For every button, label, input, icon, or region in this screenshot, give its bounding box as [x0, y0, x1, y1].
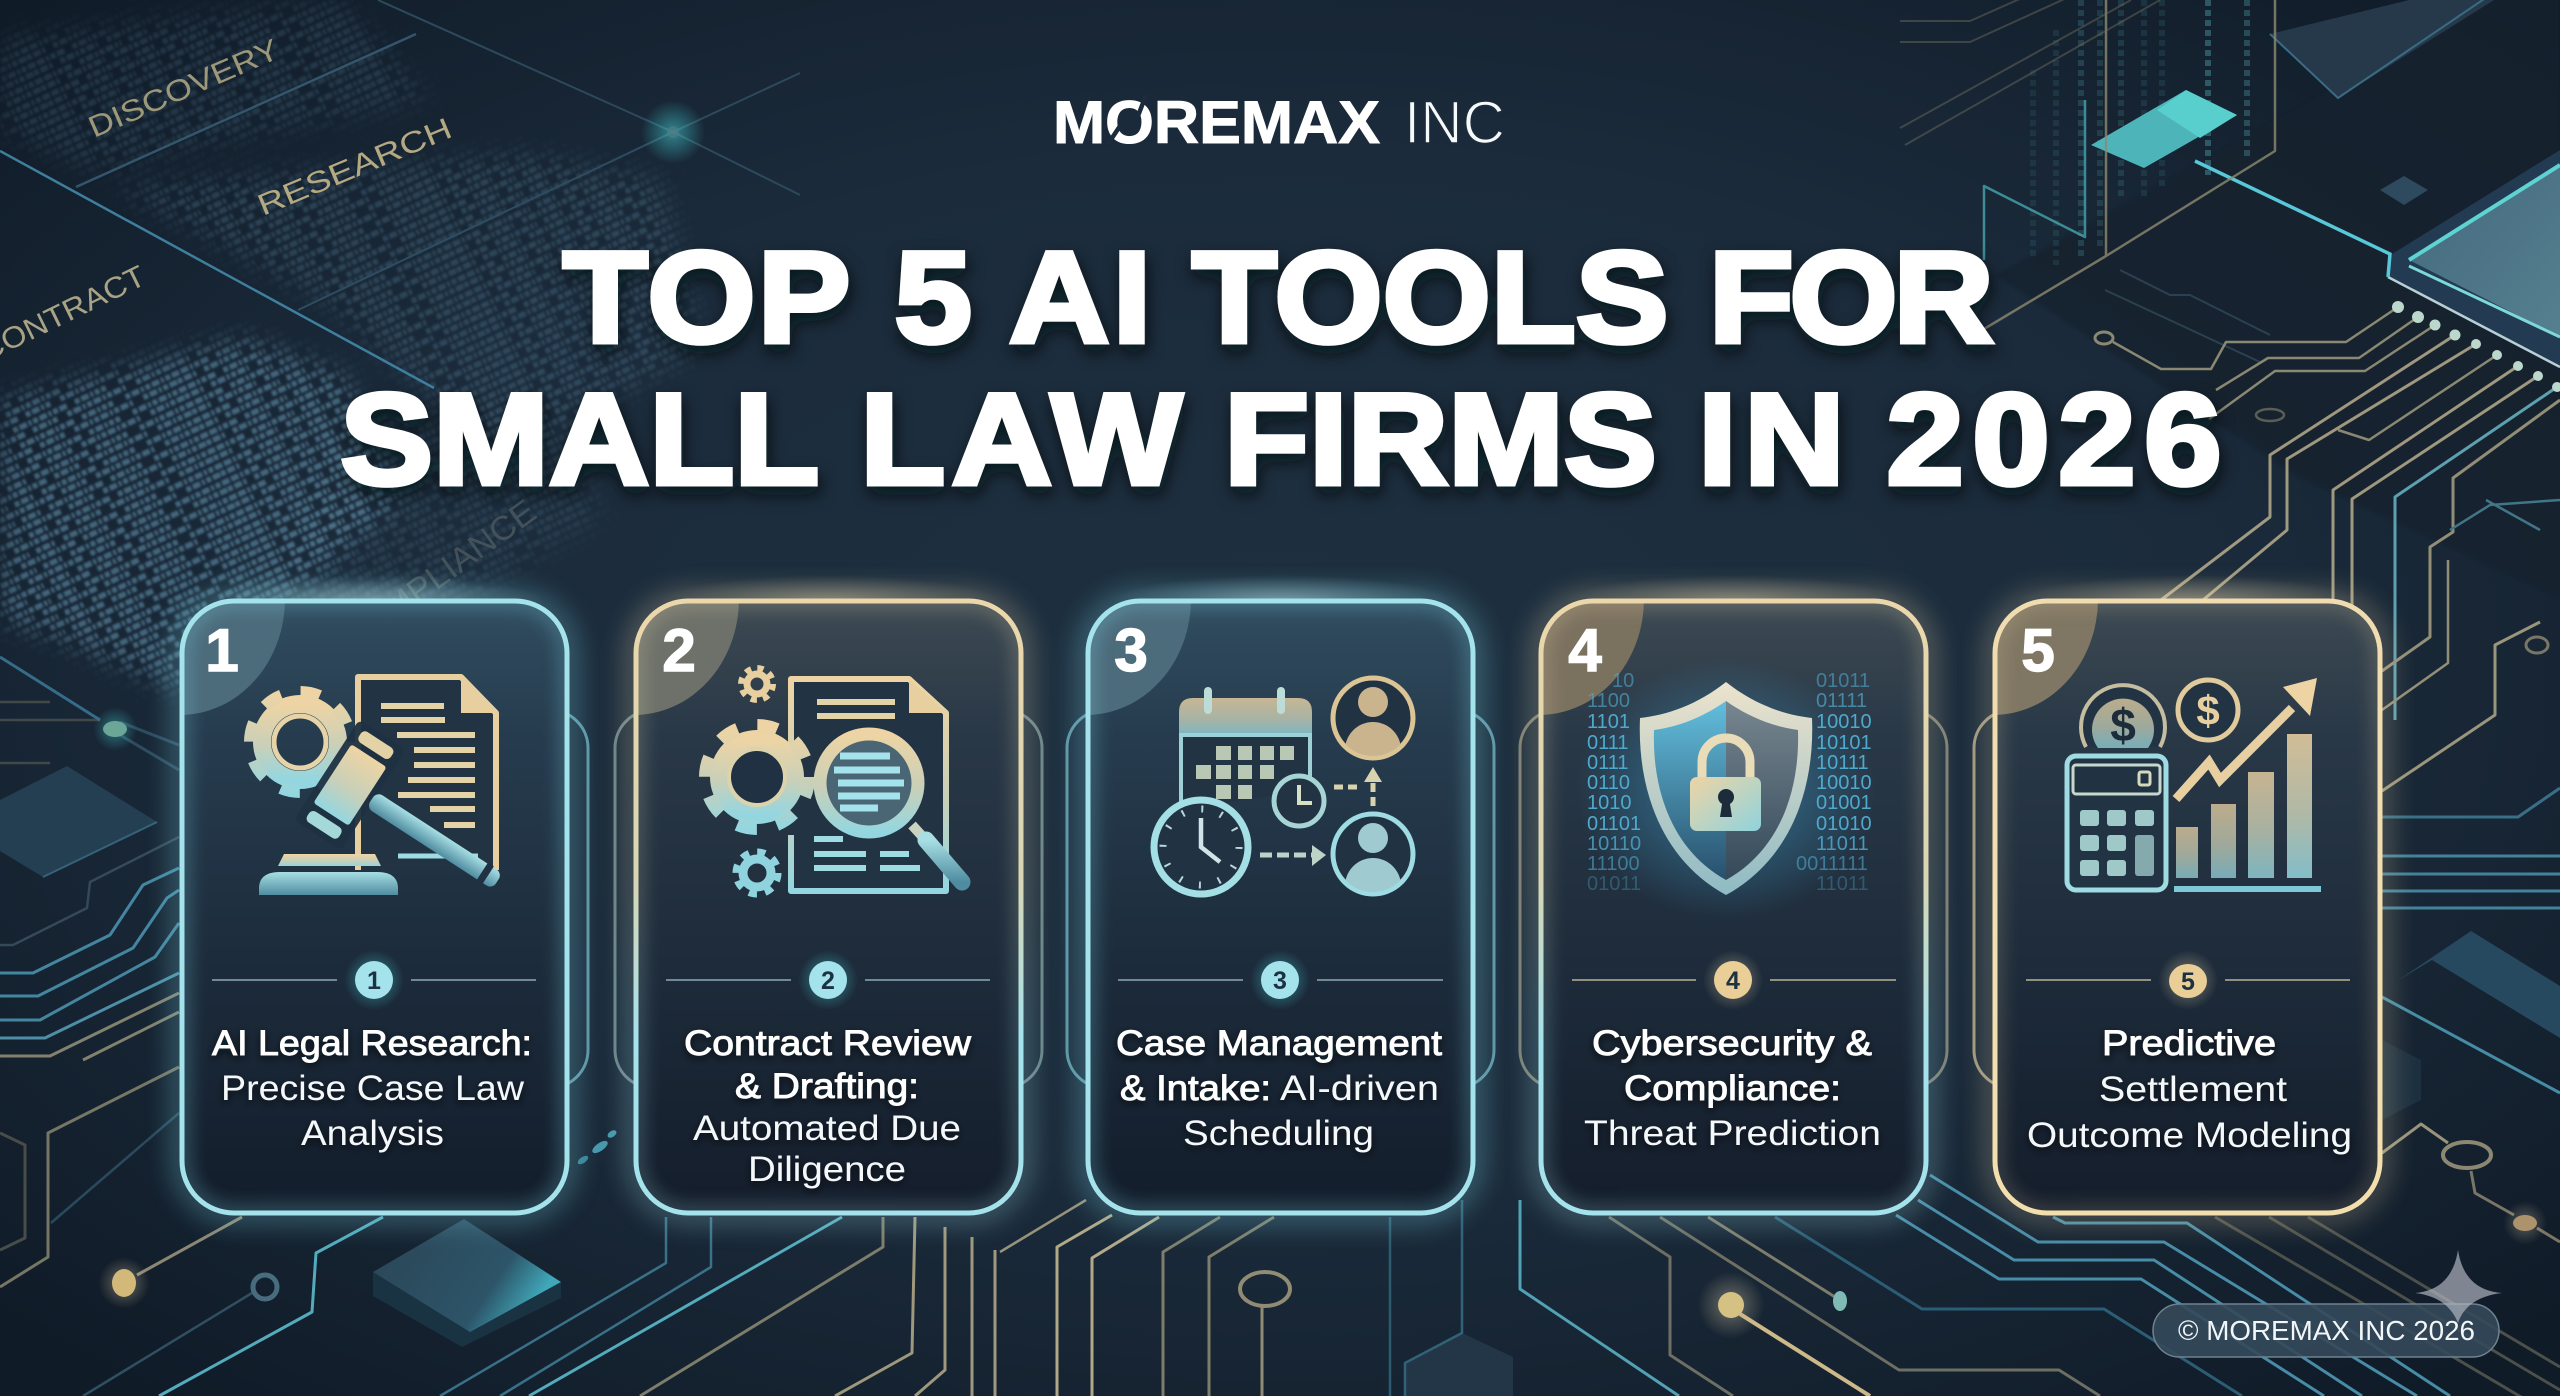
title: FIRMS — [1224, 366, 1695, 512]
binary digits left: 01101 — [1587, 813, 1641, 835]
background: circuit traces, left edge — [0, 657, 179, 1287]
card 4 divider badge — [1572, 950, 1896, 1010]
company logo — [1053, 89, 1505, 156]
card 4 text: Cybersecurity & — [1592, 1024, 1872, 1063]
card 5 icon: coins, calculator, rising chart: $ — [2110, 699, 2136, 751]
card 4 text: Threat Prediction — [1584, 1114, 1881, 1153]
binary digits right: 01001 — [1816, 792, 1872, 814]
title — [340, 224, 2230, 512]
card 4 icon: shield, lock, binary — [1576, 660, 1876, 920]
card 2 divider badge: 2 — [821, 967, 835, 995]
star flare — [641, 100, 705, 164]
binary digits right: 10111 — [1816, 752, 1869, 774]
card 2 text — [684, 1024, 972, 1189]
card 3 text — [1116, 1024, 1442, 1153]
binary digits right: 01111 — [1816, 690, 1867, 712]
binary digits left: 01011 — [1587, 873, 1641, 895]
binary rain — [2033, 0, 2247, 265]
binary digits right: 0011111 — [1796, 853, 1868, 875]
background: legal documents — [0, 0, 800, 696]
chip pads — [2392, 301, 2560, 392]
title: AI — [1009, 224, 1196, 370]
card 3: case management — [1067, 575, 1494, 1213]
company logo: MOREMAX — [1053, 89, 1380, 156]
card 4 corner number: 4 — [1568, 617, 1602, 684]
card 2 corner number: 2 — [662, 617, 696, 684]
binary digits right: 10010 — [1816, 772, 1872, 794]
card 1: AI legal research — [180, 575, 588, 1213]
title: IN — [1698, 366, 1898, 512]
card 5 divider badge: 5 — [2181, 968, 2195, 996]
card 2 text: & Drafting: — [735, 1067, 919, 1106]
binary digits left: 10110 — [1587, 833, 1641, 855]
binary digits left: 0110 — [1587, 772, 1630, 794]
title: TOP — [563, 224, 891, 370]
chip — [2195, 150, 2560, 367]
binary digits left: 1101 — [1587, 711, 1630, 733]
card 2 divider badge — [666, 950, 990, 1010]
doc label: discovery: DISCOVERY — [84, 33, 284, 144]
title: 5 — [895, 224, 1011, 370]
binary digits left: 0111 — [1587, 752, 1629, 774]
binary digits left: 0111 — [1587, 732, 1629, 754]
doc label: compliance: COMPLIANCE — [333, 492, 543, 659]
card 5 corner number: 5 — [2021, 617, 2055, 684]
card 3 corner number: 3 — [1114, 617, 1148, 684]
card 5: predictive settlement — [1974, 575, 2380, 1213]
card 1 divider badge — [212, 950, 536, 1010]
binary digits left: 11100 — [1587, 853, 1640, 875]
card 4 text — [1584, 1024, 1881, 1153]
binary digits right — [1796, 670, 1872, 895]
card 1 corner number: 1 — [205, 617, 239, 684]
binary digits left: 1010 — [1587, 792, 1632, 814]
card 3 text: AI-driven — [1280, 1069, 1439, 1108]
binary digits right: 10010 — [1816, 711, 1872, 733]
card 2 text: Contract Review — [684, 1024, 972, 1063]
card 5 icon: coins, calculator, rising chart: $ — [2196, 687, 2220, 734]
card 5 icon: coins, calculator, rising chart — [2067, 678, 2321, 890]
card 2 text: Automated Due — [693, 1109, 961, 1148]
chip square — [2380, 176, 2428, 205]
binary digits right: 11011 — [1816, 833, 1869, 855]
binary digits right: 11011 — [1816, 873, 1869, 895]
title: 2026 — [1886, 366, 2230, 512]
card 5 text: Outcome Modeling — [2027, 1116, 2352, 1155]
card 2 icon: gears, document, magnifier — [706, 668, 962, 894]
card 1 icon: gear, document, gavel — [250, 677, 530, 931]
binary digits right: 01011 — [1816, 670, 1870, 692]
background: chip and circuit board, top right — [1900, 0, 2560, 720]
card 1 text: AI Legal Research: — [212, 1024, 532, 1063]
isometric diamond block — [373, 1219, 561, 1347]
footer copyright pill — [2153, 1304, 2499, 1357]
background: circuit traces, bottom — [83, 1129, 2560, 1396]
binary digits left: 1100 — [1587, 690, 1630, 712]
card 5 text: Settlement — [2099, 1070, 2287, 1109]
card 4 text: Compliance: — [1624, 1069, 1841, 1108]
background: circuit traces, right edge — [2382, 622, 2560, 1245]
binary digits right: 10101 — [1816, 732, 1872, 754]
company logo: INC — [1404, 89, 1505, 156]
card 5 divider badge — [2026, 950, 2350, 1010]
card 3 text: Case Management — [1116, 1024, 1442, 1063]
sparkle watermark — [2415, 1250, 2502, 1323]
title: TOOLS — [1192, 224, 1707, 370]
card 2 text: Diligence — [748, 1150, 906, 1189]
card 5 text: Predictive — [2102, 1024, 2276, 1063]
card 3 divider badge: 3 — [1273, 967, 1287, 995]
doc label: research: RESEARCH — [253, 112, 457, 222]
binary digits right: 01010 — [1816, 813, 1872, 835]
card 1 text — [212, 1024, 532, 1153]
card 4: cybersecurity — [1520, 575, 1947, 1213]
card 3 divider badge — [1118, 950, 1443, 1010]
title: SMALL — [340, 366, 855, 512]
slab — [2397, 931, 2560, 1038]
card 3 text: & Intake: — [1120, 1069, 1271, 1108]
footer copyright pill: © MOREMAX INC 2026 — [2178, 1315, 2475, 1346]
card 5 text — [2027, 1024, 2352, 1155]
card 1 text: Analysis — [301, 1114, 444, 1153]
binary digits left — [1587, 670, 1641, 895]
binary digits left: 10 — [1612, 670, 1634, 692]
card 1 text: Precise Case Law — [221, 1069, 525, 1108]
teal floating tile — [2091, 90, 2237, 168]
card 3 text: Scheduling — [1183, 1114, 1374, 1153]
card 2: contract review — [615, 575, 1042, 1213]
title: FOR — [1709, 224, 1992, 370]
title: LAW — [860, 366, 1234, 512]
card 3 icon: calendar, clocks, people — [1154, 678, 1413, 914]
card 4 divider badge: 4 — [1726, 967, 1740, 995]
card 1 divider badge: 1 — [367, 967, 381, 995]
